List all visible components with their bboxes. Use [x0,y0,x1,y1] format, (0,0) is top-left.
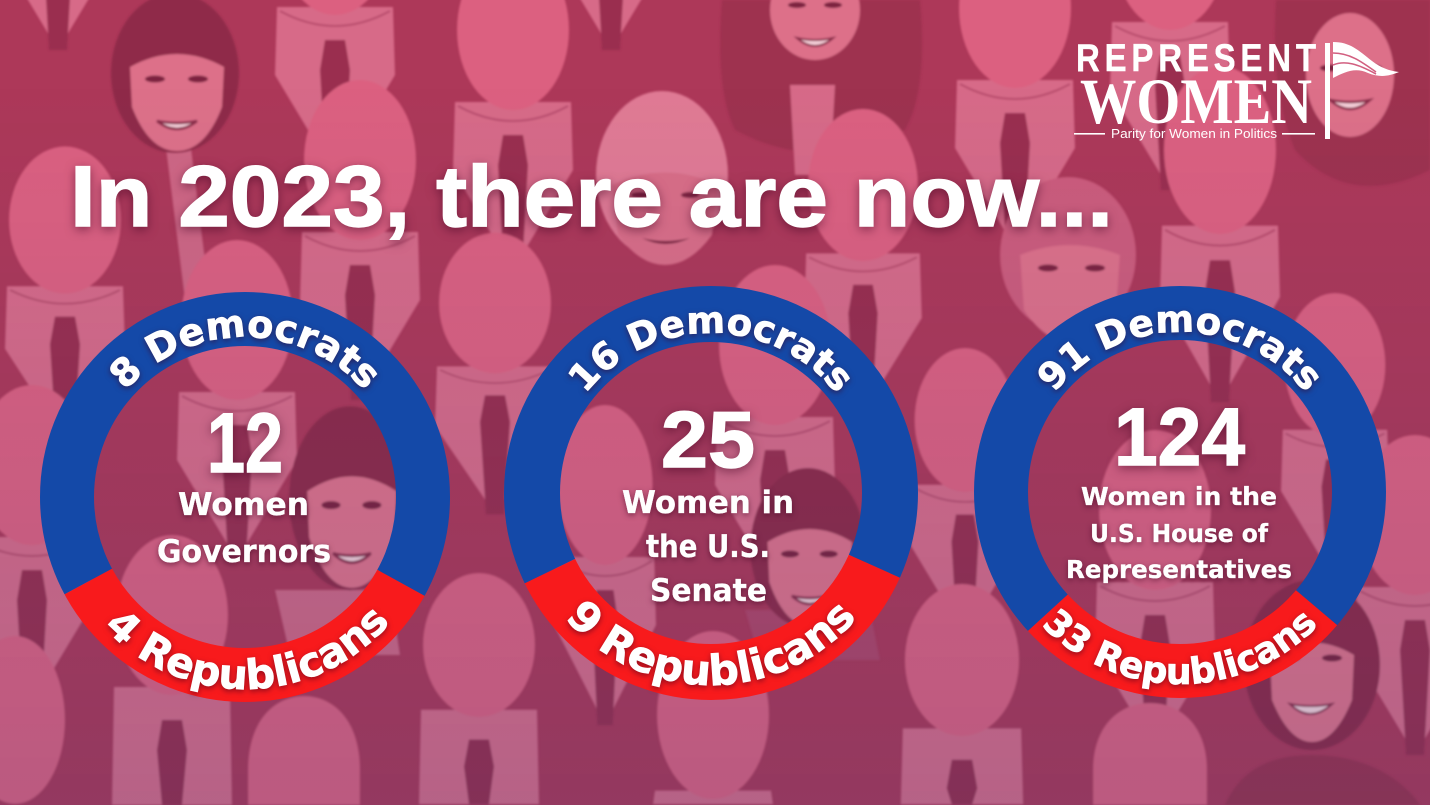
count: 124: 124 [1114,392,1245,483]
logo: RepresentWomen [1074,35,1399,141]
label: Women in the U.S. House of Representatives: Women in the [1081,482,1277,511]
ring: senate [504,286,918,700]
count: 12: 12 [207,396,283,490]
label: Women in the U.S. House of Representatives [1066,482,1292,584]
label: 16 Democrats: 16 Democrats [566,310,852,396]
logo: RepresentWomen: REPRESENT [1076,35,1316,80]
label: Women in the U.S. Senate: Senate [650,573,767,609]
label: Women in the U.S. Senate: Women in [622,485,794,521]
logo: RepresentWomen: Parity for Women in Politics [1111,126,1278,141]
count: 25: 25 [661,395,755,484]
ring: governors [40,292,450,702]
label: Women Governors [157,487,331,570]
title: In 2023, there are now... [70,149,1113,245]
label: Women in the U.S. House of Representatives: U.S. House of [1090,519,1269,548]
label: Women Governors: Governors [157,534,331,570]
label: 9 Republicans: 9 Republicans [565,600,857,692]
label: Women Governors: Women [178,487,309,523]
ring: house [974,286,1386,698]
label: 8 Democrats: 8 Democrats [107,314,380,392]
label: 91 Democrats: 91 Democrats [1036,310,1321,394]
label: Women in the U.S. House of Representatives: Representatives [1066,555,1292,584]
logo: RepresentWomen: WOMEN [1080,66,1312,138]
label: Women in the U.S. Senate [622,485,794,609]
label: 4 Republicans: 4 Republicans [106,609,390,696]
label: Women in the U.S. Senate: the U.S. [646,529,770,565]
label: 33 Republicans: 33 Republicans [1040,608,1319,694]
